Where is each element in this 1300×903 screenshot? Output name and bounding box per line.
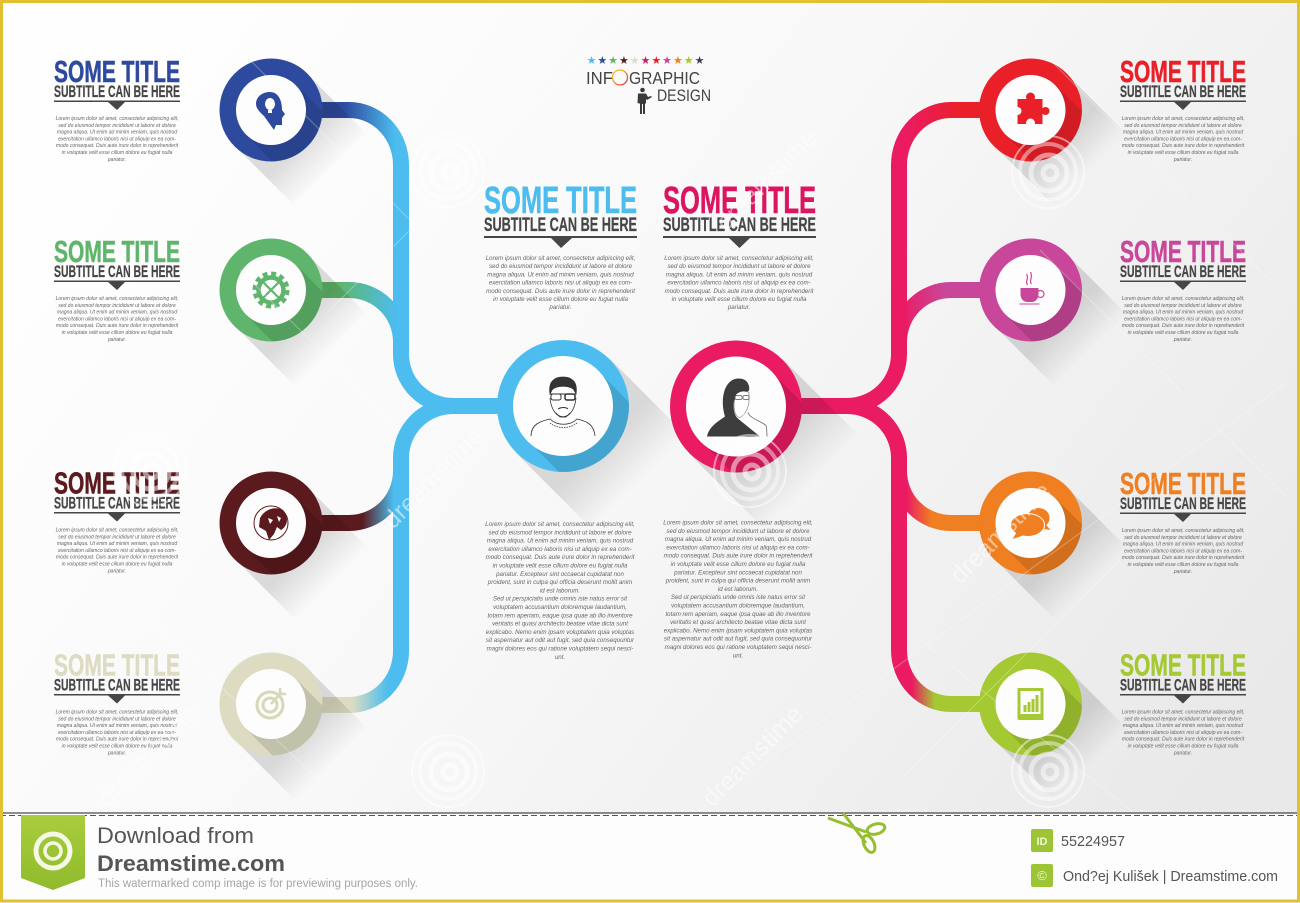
text block: left long description: in voluptate velit esse cillum dolore eu fugiat nulla (493, 562, 628, 570)
divider with pointer (484, 236, 637, 248)
panel: left item 1 text (54, 54, 180, 163)
logo: infographic design (586, 54, 711, 114)
icon: tablet with bars (1018, 688, 1044, 720)
text block: right long description: totam rem aperiam, eaque ipsa quae ab illo inventore (665, 611, 811, 618)
body text: exercitation ullamco laboris nisi ut aliquip ex ea com- (58, 548, 176, 554)
body text: modo consequat. Duis aute irure dolor in reprehenderit (56, 323, 179, 329)
text block: left long description: sed do eiusmod tempor incididunt ut labore et dolore (488, 529, 632, 536)
panel: right item 2 text (1120, 234, 1246, 343)
footer: green ribbon logo (21, 815, 85, 890)
logo star row: ★ (662, 54, 672, 67)
logo star row: ★ (684, 54, 694, 67)
text block: left long description: magna aliqua. Ut enim ad minim veniam, quis nostrud (487, 538, 634, 545)
body text: sed do eiusmod tempor incididunt ut labore et dolore (58, 303, 176, 309)
panel: right item 3 text (1120, 466, 1246, 575)
body text: Lorem ipsum dolor sit amet, consectetur adipiscing elit, (56, 116, 178, 122)
text block: right long description: pariatur. Excepteur sint occaecat cupidatat non (673, 569, 802, 576)
body text: pariatur. (1173, 750, 1192, 756)
watermark overlay: dreamstime (92, 700, 205, 812)
divider with pointer (54, 512, 180, 522)
body text: Lorem ipsum dolor sit amet, consectetur adipiscing elit, (486, 255, 635, 262)
icon: puzzle piece (1014, 92, 1050, 128)
icon: coffee cup (1020, 272, 1044, 304)
watermark overlay: dreamstime (944, 477, 1057, 589)
panel: left item 4 text (54, 648, 180, 756)
logo star row: ★ (695, 54, 705, 67)
body text: modo consequat. Duis aute irure dolor in reprehenderit (486, 288, 635, 295)
icon: scissors (828, 813, 886, 854)
body text: Lorem ipsum dolor sit amet, consectetur adipiscing elit, (1122, 296, 1244, 302)
body text: magna aliqua. Ut enim ad minim veniam, quis nostrud (57, 310, 177, 316)
icon: target (257, 688, 286, 718)
text block: right long description: in voluptate velit esse cillum dolore eu fugiat nulla (671, 561, 806, 568)
body text: magna aliqua. Ut enim ad minim veniam, quis nostrud (1123, 130, 1243, 136)
icon: ID badge: ID (1036, 836, 1048, 848)
body text: magna aliqua. Ut enim ad minim veniam, quis nostrud (487, 271, 634, 278)
title: SOME TITLE (54, 54, 180, 89)
body text: in voluptate velit esse cillum dolore eu fugiat nulla (493, 296, 628, 303)
body text: magna aliqua. Ut enim ad minim veniam, quis nostrud (57, 130, 177, 136)
body text: exercitation ullamco laboris nisi ut aliquip ex ea com- (1124, 548, 1242, 554)
divider with pointer (1120, 100, 1246, 110)
body text: sed do eiusmod tempor incididunt ut labore et dolore (1124, 716, 1242, 722)
text block: right long description: magna aliqua. Ut enim ad minim veniam, quis nostrud (665, 536, 812, 543)
body text: sed do eiusmod tempor incididunt ut labore et dolore (1124, 123, 1242, 129)
node: head with lightbulb icon (220, 58, 360, 198)
left connector lines (320, 110, 500, 705)
text block: right long description: explicabo. Nemo enim ipsam voluptatem quia voluptas (664, 627, 812, 634)
panel: center right heading (663, 180, 816, 311)
body text: in voluptate velit esse cillum dolore eu fugiat nulla (62, 150, 173, 156)
logo ring letter (612, 70, 628, 85)
text block: right long description: Sed ut perspiciatis unde omnis iste natus error sit (671, 594, 805, 601)
subtitle: SUBTITLE CAN BE HERE (54, 83, 180, 101)
title: SOME TITLE (54, 234, 180, 269)
divider with pointer (54, 694, 180, 704)
logo star row: ★ (608, 54, 618, 67)
text block: left long description: sit aspernatur aut odit aut fugit, sed quia consequuntur (486, 637, 635, 644)
body text: sed do eiusmod tempor incididunt ut labore et dolore (58, 123, 176, 129)
text block: left long description: explicabo. Nemo enim ipsam voluptatem quia voluptas (486, 629, 634, 636)
text block: right long description: Lorem ipsum dolor sit amet, consectetur adipiscing elit, (663, 520, 813, 526)
heading title: SOME TITLE (484, 180, 637, 222)
body text: pariatur. (107, 568, 126, 574)
icon: ID badge (1031, 829, 1053, 852)
body text: modo consequat. Duis aute irure dolor in reprehenderit (1122, 555, 1245, 561)
body text: in voluptate velit esse cillum dolore eu fugiat nulla (62, 330, 173, 336)
node: globe icon (220, 472, 360, 611)
node: speech bubbles icon (980, 472, 1118, 611)
subtitle: SUBTITLE CAN BE HERE (54, 676, 180, 694)
body text: Lorem ipsum dolor sit amet, consectetur adipiscing elit, (56, 528, 178, 534)
body text: in voluptate velit esse cillum dolore eu fugiat nulla (672, 296, 807, 303)
logo star row: ★ (641, 54, 651, 67)
footer: dreamstime brand: Dreamstime.com (97, 851, 285, 876)
body text: sed do eiusmod tempor incididunt ut labore et dolore (667, 263, 811, 270)
footer background (0, 814, 1300, 903)
text block: right long description: exercitation ullamco laboris nisi ut aliquip ex ea com- (666, 544, 810, 551)
icon: copyright badge: © (1037, 868, 1047, 883)
body text: pariatur. (1173, 569, 1192, 575)
body text: pariatur. (107, 337, 126, 343)
body text: in voluptate velit esse cillum dolore eu fugiat nulla (1128, 562, 1239, 568)
divider with pointer (54, 100, 180, 110)
footer: author credit: Ond?ej Kulišek | Dreamstime.com (1063, 869, 1278, 885)
icon: head with lightbulb (256, 92, 285, 130)
body text: sed do eiusmod tempor incididunt ut labore et dolore (58, 534, 176, 540)
footer cut lines (0, 813, 1300, 816)
body text: modo consequat. Duis aute irure dolor in reprehenderit (1122, 323, 1245, 329)
logo star row: ★ (651, 54, 661, 67)
body text: in voluptate velit esse cillum dolore eu fugiat nulla (62, 744, 173, 750)
body text: in voluptate velit esse cillum dolore eu fugiat nulla (1128, 330, 1239, 336)
icon: copyright badge (1031, 864, 1053, 887)
watermark overlay: dreamstime (696, 700, 809, 812)
logo star row: ★ (630, 54, 640, 67)
body text: magna aliqua. Ut enim ad minim veniam, quis nostrud (57, 541, 177, 547)
subtitle: SUBTITLE CAN BE HERE (54, 263, 180, 281)
body text: magna aliqua. Ut enim ad minim veniam, quis nostrud (57, 723, 177, 729)
body text: pariatur. (107, 157, 126, 163)
node: target icon (220, 652, 360, 792)
panel: left item 2 text (54, 234, 180, 343)
logo star row: ★ (619, 54, 629, 67)
logo star row (587, 54, 705, 67)
text block: left long description: voluptatem accusantium doloremque laudantium, (493, 604, 627, 611)
body text: Lorem ipsum dolor sit amet, consectetur adipiscing elit, (1122, 116, 1244, 122)
body text: exercitation ullamco laboris nisi ut aliquip ex ea com- (58, 136, 176, 142)
node: man avatar (498, 340, 674, 519)
node: gear icon (220, 238, 360, 378)
body text: modo consequat. Duis aute irure dolor in reprehenderit (56, 737, 179, 743)
text block: left long description: pariatur. Excepteur sint occaecat cupidatat non (495, 571, 624, 578)
text block: left long description: id est laborum. (540, 587, 580, 594)
divider with pointer (1120, 694, 1246, 704)
right connector lines (800, 110, 980, 704)
panel: right item 1 text (1120, 54, 1246, 163)
logo wordmark end: GRAPHIC (629, 68, 700, 88)
panel: right item 4 text (1120, 648, 1246, 756)
body text: exercitation ullamco laboris nisi ut aliquip ex ea com- (1124, 730, 1242, 736)
body text: exercitation ullamco laboris nisi ut aliquip ex ea com- (489, 280, 632, 287)
logo subtitle: DESIGN (657, 87, 711, 105)
heading title: SOME TITLE (663, 180, 816, 222)
body text: pariatur. (727, 304, 750, 311)
text block: left long description: veritatis et quasi architecto beatae vitae dicta sunt (492, 621, 628, 628)
body text: exercitation ullamco laboris nisi ut aliquip ex ea com- (1124, 136, 1242, 142)
title: SOME TITLE (54, 466, 180, 500)
watermark overlay: dreamstime (377, 422, 490, 534)
text block: right long description: id est laborum. (718, 586, 758, 593)
node: coffee cup icon (980, 238, 1118, 378)
logo wordmark: INF (586, 68, 613, 88)
text block: left long description: Sed ut perspiciatis unde omnis iste natus error sit (493, 596, 627, 603)
body text: pariatur. (1173, 157, 1192, 163)
text block: right long description: proident, sunt in culpa qui officia deserunt mollit anim (665, 578, 810, 585)
logo presenter figure (638, 88, 652, 114)
text block: right long description: sit aspernatur aut odit aut fugit, sed quia consequuntur (664, 636, 813, 643)
text block: right long description: voluptatem accusantium doloremque laudantium, (671, 602, 805, 610)
body text: in voluptate velit esse cillum dolore eu fugiat nulla (1128, 150, 1239, 156)
body text: pariatur. (107, 750, 126, 756)
logo star row: ★ (597, 54, 607, 67)
body text: exercitation ullamco laboris nisi ut aliquip ex ea com- (667, 280, 811, 287)
body text: Lorem ipsum dolor sit amet, consectetur adipiscing elit, (664, 255, 814, 262)
text block: right long description: sed do eiusmod tempor incididunt ut labore et dolore (666, 528, 810, 535)
icon: man with glasses (531, 377, 595, 436)
body text: magna aliqua. Ut enim ad minim veniam, quis nostrud (1123, 723, 1243, 729)
footer: preview note: This watermarked comp image is for previewing purposes only. (98, 878, 418, 890)
text block: left long description: unt. (555, 654, 565, 661)
text block: left long description: magni dolores eos qui ratione voluptatem sequi nesci- (487, 646, 633, 652)
body text: sed do eiusmod tempor incididunt ut labore et dolore (58, 716, 176, 722)
divider with pointer (54, 280, 180, 290)
body text: Lorem ipsum dolor sit amet, consectetur adipiscing elit, (1122, 528, 1244, 534)
text block: left long description: Lorem ipsum dolor sit amet, consectetur adipiscing elit, (485, 521, 635, 528)
panel: left item 3 text (54, 466, 180, 574)
body text: pariatur. (548, 304, 572, 311)
text block: left long description: proident, sunt in culpa qui officia deserunt mollit anim (487, 579, 632, 586)
body text: pariatur. (1173, 337, 1192, 343)
panel: center left heading (484, 180, 637, 311)
node: tablet chart icon (980, 652, 1118, 788)
subtitle: SUBTITLE CAN BE HERE (54, 494, 180, 512)
body text: Lorem ipsum dolor sit amet, consectetur adipiscing elit, (56, 296, 178, 302)
footer: image id: 55224957 (1061, 834, 1125, 850)
heading subtitle: SUBTITLE CAN BE HERE (484, 215, 637, 236)
body text: sed do eiusmod tempor incididunt ut labore et dolore (1124, 535, 1242, 541)
body text: exercitation ullamco laboris nisi ut aliquip ex ea com- (1124, 316, 1242, 322)
body text: modo consequat. Duis aute irure dolor in reprehenderit (1122, 737, 1245, 743)
body text: magna aliqua. Ut enim ad minim veniam, quis nostrud (666, 271, 813, 278)
logo star row: ★ (673, 54, 683, 67)
text block: left long description: modo consequat. Duis aute irure dolor in reprehenderit (486, 554, 635, 561)
body text: sed do eiusmod tempor incididunt ut labore et dolore (489, 263, 633, 270)
body text: exercitation ullamco laboris nisi ut aliquip ex ea com- (58, 730, 176, 736)
text block: right long description: magni dolores eos qui ratione voluptatem sequi nesci- (665, 644, 811, 651)
node: puzzle icon (980, 58, 1119, 198)
heading subtitle: SUBTITLE CAN BE HERE (663, 215, 816, 236)
node: woman avatar (670, 340, 848, 520)
body text: in voluptate velit esse cillum dolore eu fugiat nulla (1128, 744, 1239, 750)
text block: right long description: unt. (733, 652, 743, 659)
divider with pointer (663, 236, 816, 248)
footer: download heading: Download from (97, 823, 254, 848)
body text: in voluptate velit esse cillum dolore eu fugiat nulla (62, 562, 173, 568)
divider with pointer (1120, 280, 1246, 290)
divider with pointer (1120, 512, 1246, 522)
title: SOME TITLE (54, 648, 180, 682)
body text: Lorem ipsum dolor sit amet, consectetur adipiscing elit, (56, 710, 178, 716)
body text: exercitation ullamco laboris nisi ut aliquip ex ea com- (58, 316, 176, 322)
body text: magna aliqua. Ut enim ad minim veniam, quis nostrud (1123, 542, 1243, 548)
text block: left long description: totam rem aperiam, eaque ipsa quae ab illo inventore (487, 612, 633, 619)
icon: globe (254, 506, 288, 540)
icon: woman with glasses (707, 378, 767, 436)
text block: left long description: exercitation ullamco laboris nisi ut aliquip ex ea com- (488, 546, 632, 553)
text block: right long description: modo consequat. Duis aute irure dolor in reprehenderit (664, 553, 813, 560)
logo star row: ★ (587, 54, 597, 67)
watermark overlay: dreamstime (710, 124, 823, 236)
body text: magna aliqua. Ut enim ad minim veniam, quis nostrud (1123, 310, 1243, 316)
body text: modo consequat. Duis aute irure dolor in reprehenderit (665, 288, 814, 295)
body text: sed do eiusmod tempor incididunt ut labore et dolore (1124, 303, 1242, 309)
body text: modo consequat. Duis aute irure dolor in reprehenderit (56, 143, 179, 149)
body text: Lorem ipsum dolor sit amet, consectetur adipiscing elit, (1122, 710, 1244, 716)
body text: modo consequat. Duis aute irure dolor in reprehenderit (1122, 143, 1245, 149)
text block: right long description: veritatis et quasi architecto beatae vitae dicta sunt (670, 619, 806, 626)
icon: speech bubbles (1010, 508, 1050, 539)
icon: gear (254, 274, 288, 306)
body text: modo consequat. Duis aute irure dolor in reprehenderit (56, 555, 179, 561)
